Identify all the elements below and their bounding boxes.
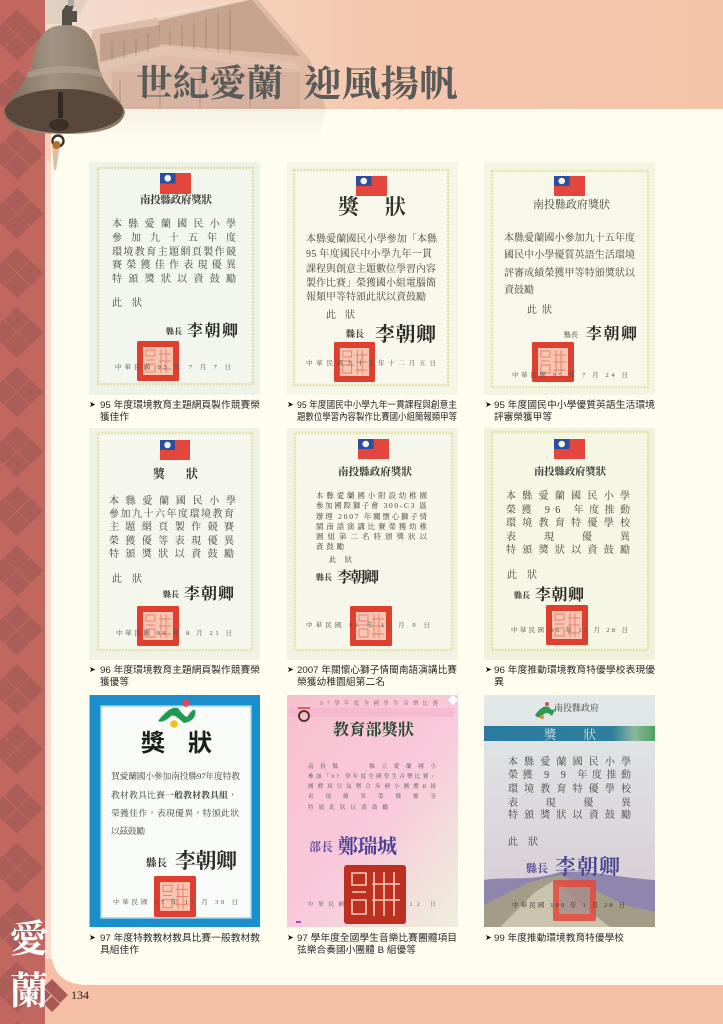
flag — [554, 439, 585, 459]
certificate heading: 南投縣政府獎狀 — [534, 465, 607, 478]
certificate 7: blue-framed teaching materials award — [90, 695, 260, 927]
award text: 榮獲 9 9 年度推動 — [508, 768, 631, 781]
caption 4: ➤ — [89, 665, 96, 674]
award text: 特頒獎狀以資鼓勵 — [109, 547, 234, 560]
award text: 本縣愛蘭國小參加九十五年度 — [504, 231, 635, 244]
event line: 97學年度全國學生音樂比賽 — [320, 699, 438, 707]
signature — [514, 585, 584, 604]
date: 中華民國 96 年 8 月 21 日 — [116, 628, 232, 637]
award text: 以茲鼓勵 — [111, 825, 145, 836]
award text: 園組第二名特頒獎狀以 — [316, 531, 428, 541]
award text: 此狀 — [112, 296, 142, 309]
flag — [356, 176, 387, 196]
caption 7 — [89, 932, 260, 956]
award text: 課程與創意主題數位學習內容 — [306, 262, 436, 275]
certificate 4: environmental web page 2007 — [89, 428, 260, 660]
caption 5: ➤ — [287, 665, 294, 674]
award text: 環境教育特優學校 — [506, 516, 631, 529]
award text — [111, 770, 240, 836]
certificate 8: pink Ministry of Education award — [287, 695, 458, 927]
caption 3: ➤ — [485, 400, 492, 409]
certificate heading: 獎 狀 — [153, 466, 199, 481]
signature: 鄭瑞城 — [338, 834, 397, 858]
date: 中華民國 96 年 11 月 9 日 — [306, 620, 430, 629]
award text: 南投縣 縣立愛蘭國小 — [308, 762, 436, 770]
caption 1: ➤ — [89, 400, 96, 409]
award text: 資鼓勵 — [504, 283, 534, 296]
caption 6 — [485, 664, 655, 688]
award text: 95 年度國民中小學九年一貫 — [306, 247, 433, 260]
award text: 環境教育特優學校 — [508, 782, 632, 795]
official seal — [334, 342, 375, 382]
award text: 參加「97 學年度全國學生音樂比賽」 — [308, 772, 436, 780]
flag — [358, 439, 389, 459]
signature — [316, 568, 379, 586]
award text: 教材教具比賽一般教材教具組， — [111, 789, 237, 800]
header band — [45, 0, 723, 109]
certificate 1: environmental web page 2006 — [89, 162, 260, 395]
official seal — [546, 605, 588, 645]
caption 5 — [287, 664, 457, 688]
flag — [160, 440, 190, 460]
caption 3: 評審榮獲甲等 — [494, 411, 552, 423]
official seal — [137, 341, 179, 381]
award text — [506, 489, 631, 581]
signature: 李朝卿 — [535, 585, 584, 604]
page number: 134 — [71, 988, 89, 1002]
award text — [306, 232, 438, 321]
school name in white brush script: 愛 — [10, 919, 48, 961]
signature — [346, 323, 436, 346]
award text: 表現優異榮獲優等 — [308, 792, 436, 800]
award text: 榮獲佳作，表現優異，特頒此狀 — [111, 807, 239, 818]
award text: 閩南語演講比賽榮獲幼稚 — [316, 521, 428, 531]
title: 世紀愛蘭 — [136, 63, 283, 105]
flag — [160, 173, 191, 194]
certificate 9: blue band and mountain award — [484, 695, 655, 927]
mountain photo — [484, 872, 655, 927]
caption 8: 97 學年度全國學生音樂比賽團體項目 — [297, 932, 457, 944]
date: 中華民國 97 年 11 月 30 日 — [113, 897, 238, 906]
title — [136, 63, 458, 105]
caption 4 — [89, 664, 260, 688]
certificate heading: 南投縣政府獎狀 — [140, 193, 212, 206]
date: 中華民國九十五年十二月五日 — [306, 358, 436, 367]
award text: 榮獲 96 年度推動 — [506, 503, 630, 516]
certificate heading: 獎 狀 — [141, 730, 212, 757]
award text: 國民中小學優質英語生活環境 — [504, 248, 635, 261]
caption 3 — [485, 399, 655, 423]
caption 8: 弦樂合奏國小團體 B 組優等 — [297, 944, 416, 956]
award text: 團體項目弦樂合奏國小團體B組 — [308, 782, 436, 790]
date: 中華民國 95 年 7 月 24 日 — [512, 370, 628, 379]
award text: 報類甲等特頒此狀以資鼓勵 — [306, 290, 426, 303]
signature: 縣長 — [514, 590, 530, 600]
icon: county logo and name: 南投縣政府 — [554, 702, 599, 713]
caption 9: ➤ — [485, 933, 492, 942]
award text: 製作比賽」榮獲國小組電腦簡 — [306, 276, 436, 289]
caption 9: 99 年度推動環境教育特優學校 — [494, 932, 624, 944]
caption 5: 榮獲幼稚園組第二名 — [297, 676, 385, 688]
certificate heading: 南投縣政府獎狀 — [338, 465, 412, 478]
signature: 李朝卿 — [187, 321, 238, 340]
date: 中華民國 95 年 7 月 7 日 — [115, 362, 231, 371]
signature: 李朝卿 — [586, 324, 637, 343]
award text — [308, 762, 436, 811]
official seal — [350, 606, 392, 646]
caption 8 — [287, 932, 457, 956]
official seal — [553, 880, 596, 921]
signature — [146, 849, 237, 873]
caption 1: 獲佳作 — [100, 411, 129, 423]
award text — [112, 217, 237, 309]
official seal — [344, 865, 406, 924]
award text: 本縣愛蘭國民小學 — [109, 494, 236, 507]
certificate 6: environmental excellence 2007 — [484, 428, 655, 660]
award text: 本縣愛蘭國民小學 — [508, 755, 631, 768]
award text: 本縣愛蘭國民小學參加「本縣 — [306, 232, 438, 245]
signature: 縣長 — [146, 856, 167, 869]
official seal — [532, 342, 574, 382]
caption 7: 97 年度特教教材教具比賽一般教材教 — [100, 932, 260, 944]
flag — [554, 176, 585, 196]
header photo: old school building — [46, 0, 326, 109]
signature: 縣長 — [526, 861, 548, 875]
signature: 縣長 — [166, 326, 182, 336]
icon: county logo and name — [535, 702, 599, 719]
caption 2: 題數位學習內容製作比賽國小組簡報類甲等 — [297, 411, 457, 423]
faded building reflection — [92, 109, 325, 155]
award text — [504, 231, 636, 316]
caption 6: 異 — [494, 677, 504, 688]
signature: 李朝卿 — [555, 855, 620, 879]
award text — [109, 494, 236, 585]
school name in white brush script: 蘭 — [10, 971, 48, 1013]
caption 4: 獲優等 — [100, 676, 129, 688]
award text: 參加九十五年度 — [112, 231, 236, 244]
signature — [163, 584, 234, 603]
caption 4: 96 年度環境教育主題網頁製作競賽榮 — [100, 664, 260, 676]
footer band — [45, 945, 723, 1024]
award text: 此狀 — [329, 554, 352, 564]
certificate heading: 南投縣政府獎狀 — [533, 197, 610, 211]
award text: 本縣愛蘭國小附設幼稚園 — [316, 490, 428, 500]
award text: 特頒獎狀以資鼓勵 — [506, 543, 630, 556]
award text: 本縣愛蘭國民小學 — [112, 217, 236, 230]
caption 7: 具組佳作 — [100, 944, 139, 956]
award text: 參加九十六年度環境教育 — [109, 507, 234, 520]
award text: 榮獲優等表現優異 — [109, 534, 235, 547]
caption 6: ➤ — [485, 665, 492, 674]
caption 1 — [89, 399, 260, 423]
signature — [564, 324, 637, 343]
blue title band — [484, 726, 655, 742]
award text: 賀愛蘭國小參加南投縣97年度特教 — [111, 770, 240, 781]
certificate 3: English living environment — [484, 162, 655, 395]
icon: county logo — [158, 699, 195, 728]
signature: 李朝卿 — [375, 323, 436, 346]
award text: 主題網頁製作競賽 — [109, 520, 235, 533]
date: 中華民國 96 年 12 月 28 日 — [511, 625, 628, 634]
caption 7: ➤ — [89, 933, 96, 942]
caption 2: 95 年度國民中小學九年一貫課程與創意主 — [297, 399, 457, 411]
certificate heading: 獎 狀 — [338, 195, 407, 219]
official seal — [154, 876, 196, 917]
award text: 此狀 — [326, 308, 355, 321]
signature: 縣長 — [163, 589, 179, 599]
award text — [508, 755, 632, 848]
award text: 資鼓勵 — [316, 541, 344, 551]
caption 1: 95 年度環境教育主題網頁製作競賽榮 — [100, 399, 260, 411]
caption 2: ➤ — [287, 400, 294, 409]
certificate heading: 教育部獎狀 — [333, 720, 415, 739]
signature — [166, 321, 238, 340]
school name in white brush script — [10, 919, 48, 1013]
title: 迎風揚帆 — [303, 64, 458, 104]
award text — [316, 490, 428, 564]
award text: 參加國際獅子會 300-C3 區 — [316, 500, 427, 510]
award text: 此狀 — [527, 303, 552, 316]
award text: 評審成績榮獲甲等特頒獎狀以 — [504, 266, 636, 279]
caption 5: 2007 年關懷心獅子情閩南語演講比賽 — [297, 664, 457, 676]
official seal — [137, 606, 179, 646]
signature: 部長 — [309, 839, 333, 854]
signature: 縣長 — [346, 328, 364, 339]
signature: 縣長 — [316, 572, 332, 582]
caption 8: ➤ — [287, 933, 294, 942]
award text: 特頒此狀以資鼓勵 — [308, 803, 388, 811]
cream content panel — [51, 109, 723, 985]
caption 3: 95 年度國民中小學優質英語生活環境 — [494, 399, 655, 411]
signature: 李朝卿 — [184, 584, 234, 603]
caption 6: 96 年度推動環境教育特優學校表現優 — [494, 664, 655, 676]
date: 中華民國 12 日 — [308, 900, 436, 908]
award text: 此狀 — [112, 572, 142, 585]
left patterned strip — [0, 0, 45, 1024]
award text: 賽榮獲佳作表現優異 — [112, 258, 237, 271]
icon: footer diamonds — [35, 979, 68, 1012]
blue title band: 獎 狀 — [544, 727, 596, 742]
award text: 特頒獎狀以資鼓勵 — [112, 272, 236, 285]
signature — [526, 855, 620, 879]
award text: 此狀 — [507, 568, 537, 581]
award text: 環境教育主題網頁製作競 — [112, 245, 236, 258]
award text: 表 現 優 異 — [506, 530, 631, 543]
icon: bronze bell — [4, 0, 125, 170]
award text: 辦理 2007 年關懷心獅子情 — [316, 511, 428, 521]
signature: 李朝卿 — [175, 849, 237, 873]
certificate 5: Lions Club speech contest — [287, 428, 458, 660]
music ornament — [296, 695, 458, 922]
signature: 縣長 — [564, 330, 578, 339]
certificate 2: digital learning content — [287, 162, 458, 395]
award text: 此狀 — [508, 835, 538, 848]
pale inner strip — [45, 109, 52, 959]
date: 中華民國 100 年 1 月 28 日 — [512, 900, 625, 909]
signature: 李朝卿 — [337, 568, 379, 586]
award text: 特頒獎狀以資鼓勵 — [508, 808, 631, 821]
award text: 表 現 優 異 — [508, 796, 632, 809]
award text: 本縣愛蘭國民小學 — [506, 489, 630, 502]
signature — [309, 834, 397, 858]
caption 2 — [287, 399, 457, 423]
